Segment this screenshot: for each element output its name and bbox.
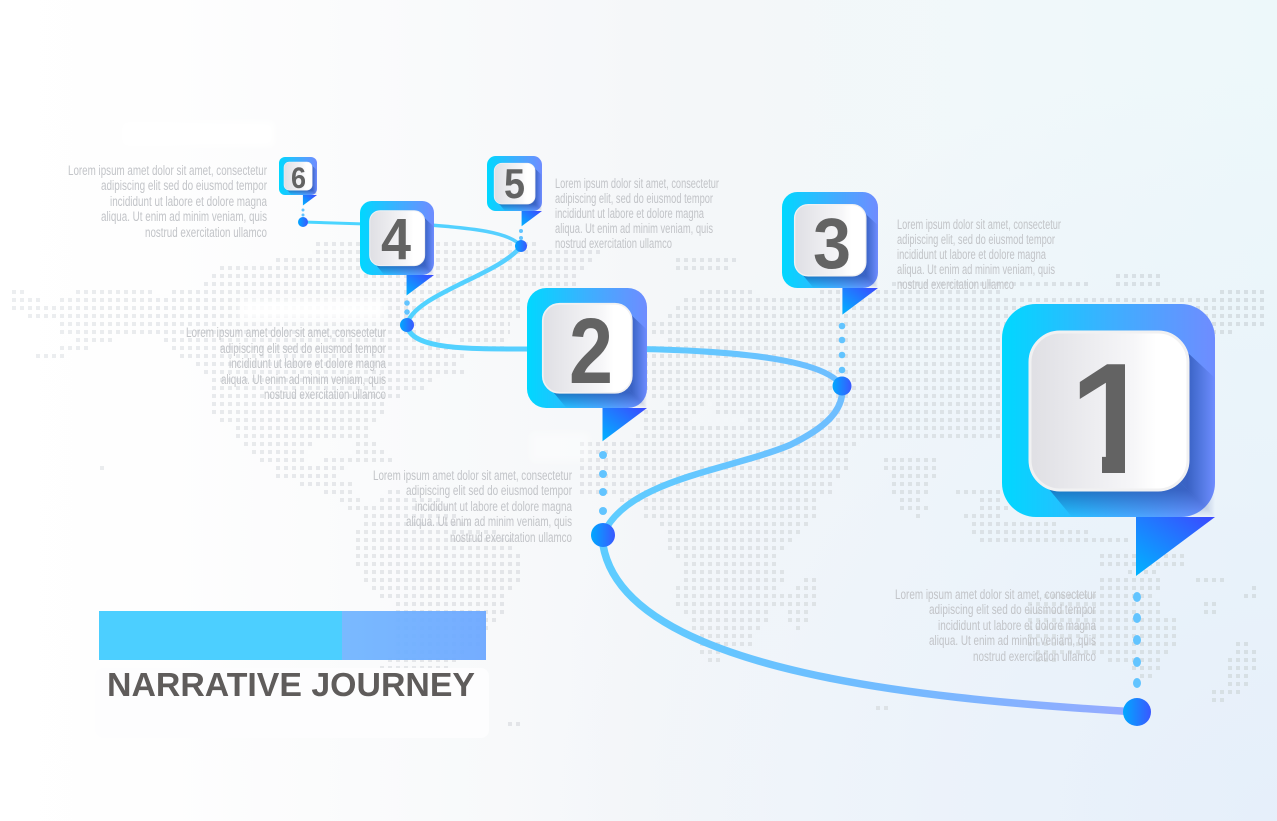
text block: step 4: aliqua. Ut enim ad minim veniam, quis xyxy=(221,372,386,387)
badge 4 xyxy=(360,201,434,295)
badge 6: 6 xyxy=(291,162,306,195)
route stop nodes xyxy=(298,217,1151,726)
text block: step 2 xyxy=(373,468,572,545)
text block: step 3: nostrud exercitation ullamco xyxy=(897,277,1014,292)
text block: step 4: adipiscing elit sed do eiusmod tempor xyxy=(220,341,386,356)
title panel xyxy=(95,611,489,738)
text block: step 2: Lorem ipsum amet dolor sit amet, consectetur xyxy=(373,468,572,483)
title: NARRATIVE JOURNEY xyxy=(107,667,475,704)
text block: step 6: Lorem ipsum amet dolor sit amet, consectetur xyxy=(68,163,267,178)
text block: step 3: adipiscing elit, sed do eiusmod tempor xyxy=(897,232,1055,247)
title backing card xyxy=(95,668,489,738)
text block: step 5: incididunt ut labore et dolore magna xyxy=(555,206,704,221)
text block: step 4: nostrud exercitation ullamco xyxy=(264,387,386,402)
text block: step 3: incididunt ut labore et dolore magna xyxy=(897,247,1046,262)
badge 1: 1 xyxy=(1069,331,1157,507)
badge 3 xyxy=(782,192,878,315)
segment: badge 2 to stop 4 xyxy=(407,325,530,349)
badge 5: 5 xyxy=(504,160,525,207)
text block: step 2: nostrud exercitation ullamco xyxy=(450,530,572,545)
text block: step 2: aliqua. Ut enim ad minim veniam, quis xyxy=(406,514,572,529)
segment: stop 4 to stop 5 xyxy=(407,246,521,325)
text block: step 1: aliqua. Ut enim ad minim veniam, quis xyxy=(929,633,1096,648)
dotted leaders xyxy=(302,208,1141,688)
text block: step 3: Lorem ipsum dolor sit amet, consectetur xyxy=(897,217,1061,232)
text block: step 6 xyxy=(68,163,267,240)
journey path xyxy=(303,222,1137,712)
badge 1 xyxy=(1002,304,1215,576)
badge 6 xyxy=(279,157,317,206)
segment: stop 2 to stop 3 xyxy=(603,386,842,535)
text block: step 1: nostrud exercitation ullamco xyxy=(973,649,1096,664)
text block: step 5: Lorem ipsum dolor sit amet, consectetur xyxy=(555,176,719,191)
badge 4: 4 xyxy=(381,207,411,272)
text block: step 1: incididunt ut labore et dolore magna xyxy=(938,618,1096,633)
text block: step 5: adipiscing elit, sed do eiusmod tempor xyxy=(555,191,713,206)
text block: step 3: aliqua. Ut enim ad minim veniam, quis xyxy=(897,262,1055,277)
dotted world map xyxy=(12,244,1268,724)
segment: stop 1 to stop 2 xyxy=(603,545,1137,712)
text block: step 4: incididunt ut labore et dolore magna xyxy=(229,356,386,371)
text block: step 6: incididunt ut labore et dolore magna xyxy=(110,194,267,209)
badge 2 xyxy=(527,288,647,441)
text block: step 4: Lorem ipsum amet dolor sit amet, consectetur xyxy=(186,325,386,340)
badge 2: 2 xyxy=(569,299,613,403)
erased map patches xyxy=(122,122,590,462)
text block: step 5: nostrud exercitation ullamco xyxy=(555,236,672,251)
badge 5 xyxy=(487,156,542,226)
segment: badge 4 to stop 6 xyxy=(303,222,365,224)
title bar xyxy=(99,611,486,660)
text block: step 3 xyxy=(897,217,1061,292)
text block: step 4 xyxy=(186,325,386,402)
text block: step 2: incididunt ut labore et dolore magna xyxy=(415,499,572,514)
segment: stop 5 to badge 4 xyxy=(430,225,521,246)
text block: step 5 xyxy=(555,176,719,251)
text block: step 6: adipiscing elit sed do eiusmod tempor xyxy=(101,178,267,193)
badge 3: 3 xyxy=(813,205,851,284)
text block: step 1 xyxy=(895,587,1096,664)
segment: stop 3 to badge 2 xyxy=(640,349,842,386)
text block: step 6: nostrud exercitation ullamco xyxy=(145,225,267,240)
text block: step 5: aliqua. Ut enim ad minim veniam, quis xyxy=(555,221,713,236)
text block: step 2: adipiscing elit sed do eiusmod tempor xyxy=(406,483,572,498)
text block: step 1: Lorem ipsum amet dolor sit amet, consectetur xyxy=(895,587,1096,602)
text block: step 6: aliqua. Ut enim ad minim veniam, quis xyxy=(101,209,267,224)
text block: step 1: adipiscing elit sed do eiusmod tempor xyxy=(929,602,1096,617)
